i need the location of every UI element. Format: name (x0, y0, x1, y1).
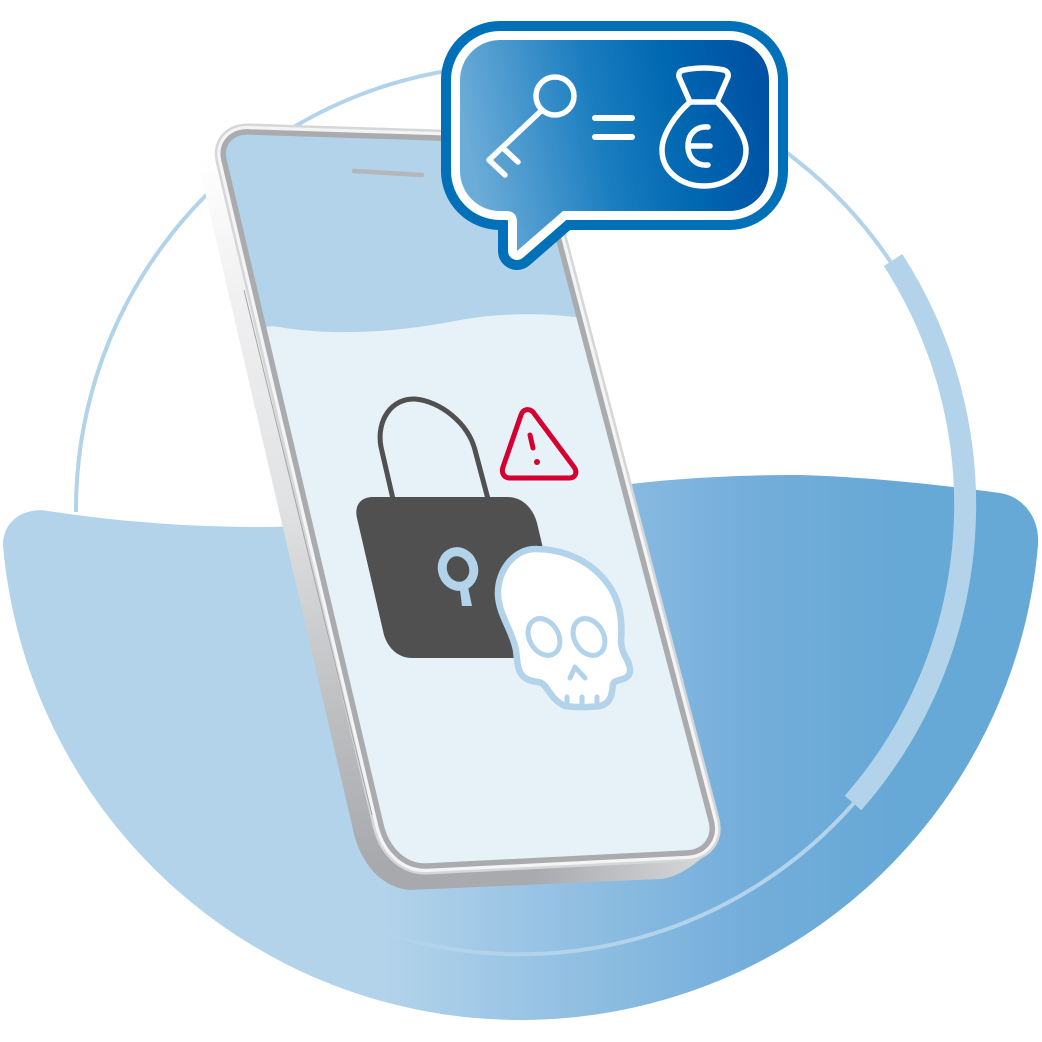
bezel edge line (244, 290, 372, 815)
phone bezel highlight (223, 132, 712, 866)
icon: key (489, 77, 574, 175)
bubble gradient fill (460, 40, 769, 251)
bubble blue outline (460, 40, 769, 251)
thick arc accent (853, 260, 965, 803)
background wave shape (3, 475, 1038, 1020)
phone bezel (223, 132, 712, 866)
skull icon (498, 549, 630, 707)
smartphone (200, 122, 760, 900)
padlock keyhole (437, 547, 479, 606)
phone screen (223, 132, 712, 866)
warning triangle icon (502, 410, 576, 478)
thin circle outline: lower arc (387, 803, 854, 954)
speech bubble (460, 40, 769, 251)
padlock shackle (380, 399, 488, 499)
phone left side body (200, 122, 430, 890)
screen border (223, 132, 712, 866)
icon: equals sign (595, 118, 632, 137)
phone bottom side body (384, 858, 702, 890)
phone earpiece (354, 171, 422, 175)
bubble white ring (460, 40, 769, 251)
padlock icon (356, 399, 560, 658)
thin circle outline: upper arc (76, 65, 891, 512)
icon: money bag with euro (662, 68, 746, 186)
screen lower panel (266, 314, 710, 864)
padlock body (356, 497, 560, 658)
